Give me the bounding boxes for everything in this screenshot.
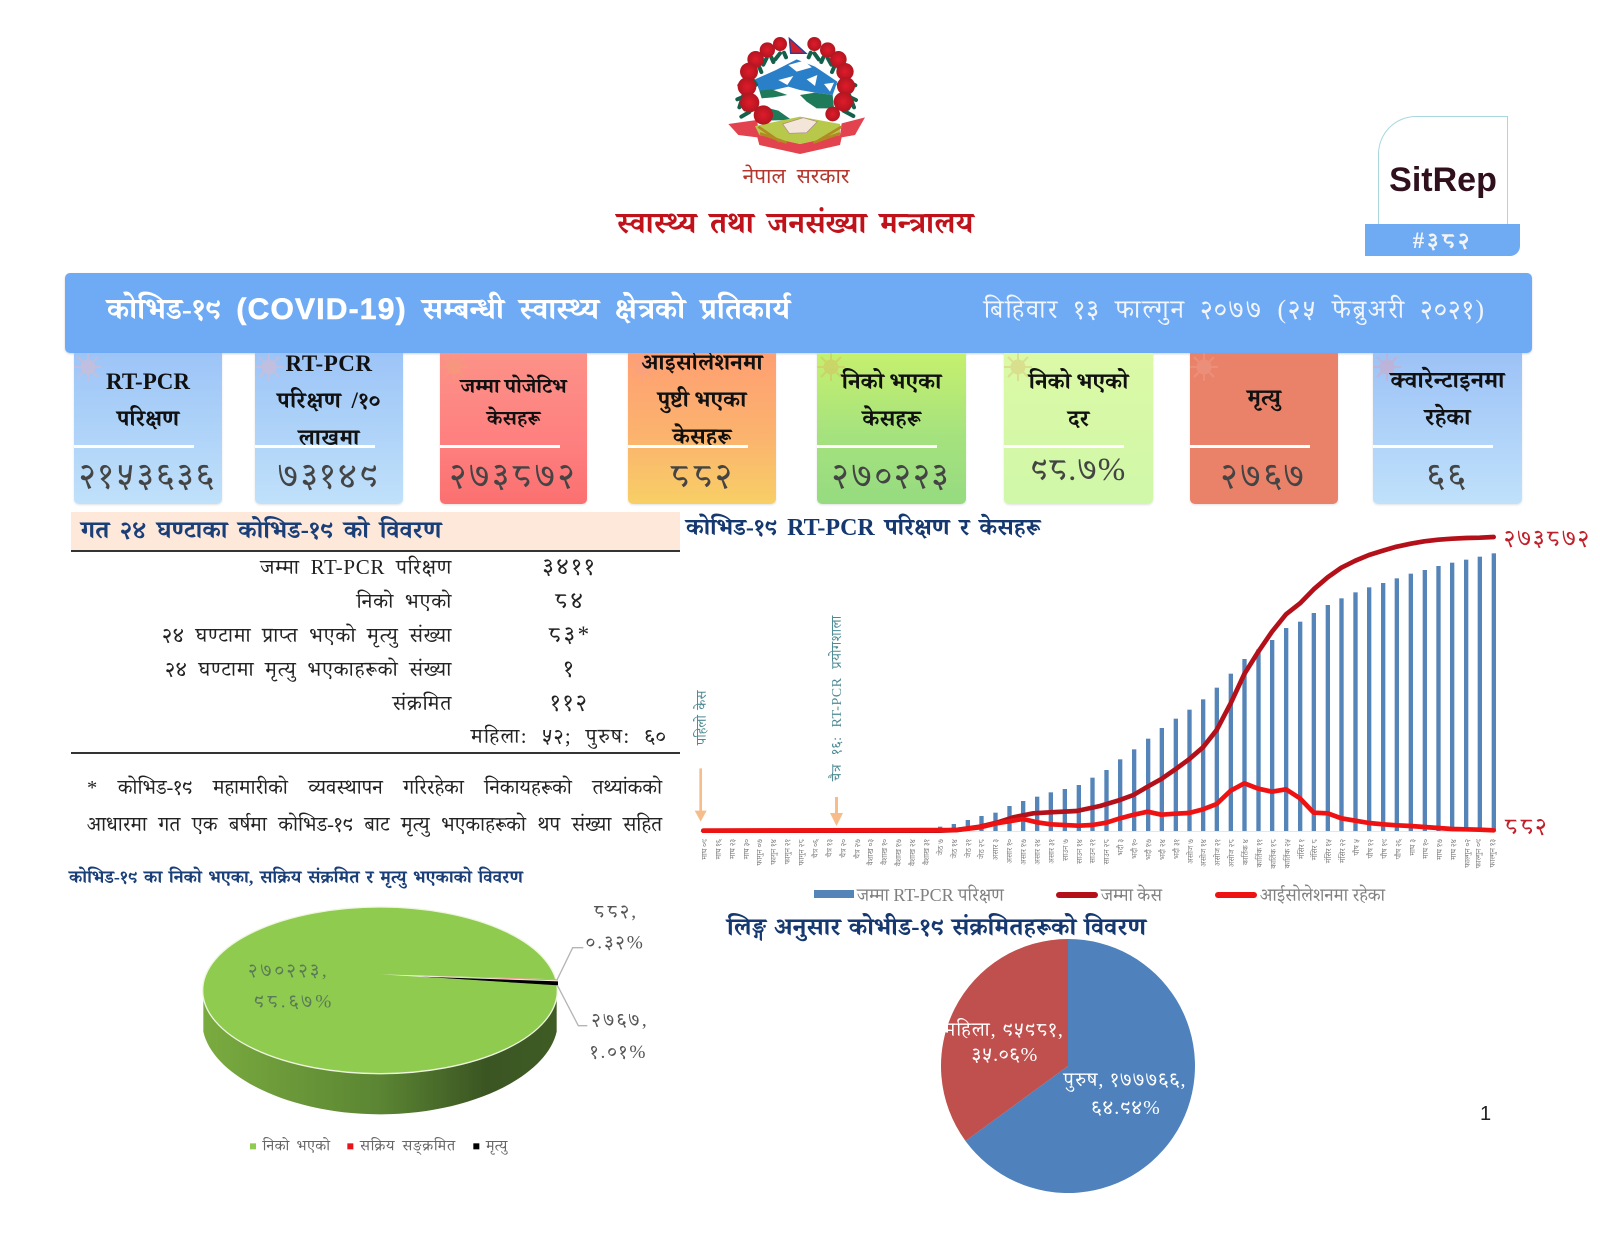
axis labels: मंसिर २२ [1338,839,1347,864]
axis labels: कार्तिक १८ [1268,839,1278,870]
chart: recovered, active and deaths 3D pie: १.०१% [590,1042,648,1063]
axis labels: कार्तिक ११ [1254,839,1264,868]
axis labels: असार ३१ [1047,839,1056,864]
chart: sex-wise pie: पुरुष, १७७७६६, [1063,1069,1186,1093]
axis labels: साउन २१ [1088,839,1097,864]
panel: deaths: २७६७ [1221,456,1307,495]
panel: total positive cases: जम्मा पोजेटिभ [460,374,567,398]
axis labels: असार १० [1005,839,1014,864]
panel: recovered cases: २७०२२३ [832,456,951,495]
slice: female [941,939,1068,1141]
axis labels: फाल्गुन १३ [1488,839,1498,868]
axis labels: फाल्गुन ०२ [1463,839,1473,869]
pie side [203,993,557,1114]
axis labels: पौष १९ [1380,839,1389,860]
axis labels: फागुन २१ [783,839,793,865]
chart: recovered, active and deaths 3D pie: ०.३२% [586,932,645,953]
panel: recovery rate: निको भएको [1029,369,1128,394]
badge: SitRep #382 [1365,116,1520,256]
axis labels: माघ ०९ [700,839,709,861]
end label: total cases: २७३८७२ [1504,526,1591,552]
label: first case: पहिलो केस [692,690,710,746]
page number: 1 [1480,1103,1491,1125]
arrow: first case [695,768,707,822]
axis labels: चैत्र ०६ [811,839,820,859]
chart: sex-wise pie: ३५.०६% [972,1044,1038,1066]
icon: government emblem of Nepal [728,36,865,154]
panel: isolation cases: केसहरू [673,424,731,448]
panel: quarantine: ६६ [1427,456,1468,495]
table: last 24 hours details: ११२ [550,690,590,715]
panel: isolation cases [628,353,776,504]
axis labels: असार २४ [1033,839,1042,865]
banner: COVID-19 health sector response [65,273,1532,353]
legend: जम्मा केस [1100,885,1163,905]
chart: sex-wise pie: महिला, ९५९८१, [943,1017,1064,1041]
axis labels: असार ३ [991,839,1000,860]
panel: recovered cases [817,353,966,504]
axis labels: भदौ ३ [1116,839,1125,856]
axis labels: फाल्गुन ०९ [1474,839,1484,869]
panel: recovery rate: ९८.७% [1031,452,1126,488]
axis labels: जेठ २८ [977,839,986,860]
axis labels: असोज २१ [1213,839,1222,866]
axis labels: माघ २३ [728,839,737,860]
chart: recovered, active and deaths 3D pie: निको भएको [262,1137,331,1155]
badge: SitRep #382: SitRep [1389,161,1497,199]
panel: RT-PCR tests: परिक्षण [117,406,179,431]
table: last 24 hours details: १ [564,656,576,681]
chart: sex-wise pie [941,939,1195,1193]
axis labels: पौष १२ [1366,839,1375,859]
axis labels: मंसिर १ [1297,839,1306,860]
axis labels: चैत्र १३ [825,839,834,858]
badge: SitRep #382: #३८२ [1413,228,1472,253]
heading: last 24 hours: गत २४ घण्टाका कोभिड-१९ को विवरण [81,517,441,544]
axis labels: जेठ २१ [964,839,973,859]
chart: sex-wise pie: ६४.९४% [1091,1097,1161,1119]
axis labels: वैशाख १७ [894,839,903,867]
label: RT-PCR lab date: चैत्र १६: RT-PCR प्रयोगशाला [827,615,845,782]
heading: last 24 hours [71,512,680,552]
panel: RT-PCR tests [74,353,222,504]
axis labels: चैत्र २० [839,839,848,859]
axis labels: पौष ५ [1352,839,1361,856]
axis labels: माघ ३० [742,839,751,860]
axis labels: जेठ ७ [936,839,945,856]
banner date: बिहिवार १३ फाल्गुन २०७७ (२५ फेब्रुअरी २०२१) [984,295,1486,324]
legend: आईसोलेशनमा रहेका [1260,885,1387,905]
note: death count footnote: आधारमा गत एक बर्षमा कोभिड-१९ बाट मृत्यु भएकाहरूको थप संख्या सहित [87,814,662,836]
text: Nepal Government: नेपाल सरकार [742,165,850,188]
chart: recovered, active and deaths 3D pie: मृत्यु [485,1138,509,1155]
panel: recovery rate: दर [1068,406,1089,431]
heading: pie chart of recovered, active and deaths: कोभिड-१९ का निको भएका, सक्रिय संक्रमित र मृत्यु भएकाको विवरण [69,867,523,887]
panel: RT-PCR per million: परिक्षण /१० [277,388,381,412]
axis labels: जेठ १४ [950,839,959,859]
chart: recovered, active and deaths 3D pie: ८८२, [593,901,638,922]
note: death count footnote: * कोभिड-१९ महामारीको व्यवस्थापन गरिरहेका निकायहरूको तथ्यांकको [87,777,662,799]
banner heading: कोभिड-१९ (COVID-19) सम्बन्धी स्वास्थ्य क्षेत्रको प्रतिकार्य [107,293,790,326]
axis labels: माघ १६ [714,839,723,860]
axis labels: वैशाख २४ [908,839,917,867]
axis labels: माघ २४ [1449,839,1458,861]
table: last 24 hours details: निको भएको [356,589,452,613]
slice: active and deaths [380,974,558,985]
panel: deaths: मृत्यु [1247,384,1281,410]
axis labels: असोज २८ [1227,839,1236,867]
axis labels: कार्तिक २५ [1282,839,1292,869]
legend [814,885,1387,905]
axis labels: माघ १७ [1435,839,1444,861]
panel: RT-PCR tests: २१५३६३६ [79,456,217,495]
axis labels: वैशाख १० [880,839,889,866]
panel: recovery rate [1004,353,1153,504]
pie top [203,907,557,1074]
axis labels: भदौ १७ [1144,839,1153,860]
panel: RT-PCR tests: RT-PCR [106,369,190,394]
axis labels: चैत्र २७ [853,839,862,860]
table: last 24 hours details: २४ घण्टामा मृत्यु भएकाहरूको संख्या [165,657,452,681]
axis labels: फागुन १४ [769,839,779,866]
heading: chart of tests and cases: कोभिड-१९ RT-PCR परिक्षण र केसहरू [686,515,1040,541]
axis labels: साउन ७ [1061,839,1070,862]
panel: RT-PCR per million [255,353,403,504]
axis labels: भदौ ३१ [1172,839,1181,859]
axis labels: मंसिर ८ [1310,839,1319,861]
heading: sex-wise breakdown: लिङ्ग अनुसार कोभीड-१९ संक्रमितहरूको विवरण [727,914,1146,941]
panel: quarantine: रहेका [1425,405,1470,431]
axis labels: माघ १० [1421,839,1430,860]
panel: isolation cases: ८८२ [669,456,735,495]
panel: RT-PCR per million: लाखमा [298,424,360,450]
chart: recovered, active and deaths 3D pie: ९८.६७% [254,991,334,1012]
panel: recovered cases: केसहरू [862,406,921,431]
axis labels: वैशाख ३१ [922,839,931,866]
chart: recovered, active and deaths 3D pie: २७६७, [592,1010,649,1031]
panel: quarantine: क्वारेन्टाइनमा [1391,368,1504,394]
table: last 24 hours details: ८४ [554,588,586,613]
axis labels: मंसिर १५ [1324,839,1333,864]
axis labels: फागुन २८ [797,839,807,866]
table: last 24 hours details: ८३* [548,622,592,647]
panel: quarantine [1373,353,1522,504]
panel: recovered cases: निको भएका [842,369,941,394]
bars: total RT-PCR tests [938,553,1496,831]
panel: total positive cases: केसहरू [487,406,540,430]
legend: जम्मा RT-PCR परिक्षण [856,885,1005,905]
panel: isolation cases: पुष्टी भएका [658,386,746,412]
axis labels [700,839,1498,870]
axis labels: कार्तिक ४ [1240,839,1250,866]
line: total cases [703,537,1494,831]
axis labels: फागुन ०७ [755,839,765,866]
chart: recovered, active and deaths 3D pie: सक्रिय सङ्क्रमित [359,1137,456,1156]
axis labels: भदौ २४ [1158,839,1167,860]
table: last 24 hours details: महिला: ५२; पुरुष: ६० [471,724,667,748]
title: ministry of health and population: स्वास्थ्य तथा जनसंख्या मन्त्रालय [617,207,973,240]
panel: total positive cases: २७३८७२ [450,456,577,495]
end label: isolation: ८८२ [1504,814,1548,840]
arrow: RT-PCR lab [830,797,843,826]
chart: recovered, active and deaths 3D pie: २७०२२३, [248,961,330,982]
axis labels: माघ ३ [1408,839,1417,856]
note: death count footnote [87,775,663,837]
table: last 24 hours details: संक्रमित [393,691,452,715]
axis labels: असोज ७ [1186,839,1195,864]
axis labels: असोज १४ [1199,839,1208,867]
panel: total positive cases [440,353,587,504]
table: last 24 hours details: ३४११ [543,554,597,579]
axis labels: भदौ १० [1130,839,1139,859]
axis labels: वैशाख ०३ [866,839,875,866]
panel: deaths [1190,353,1338,504]
slice: male [966,939,1195,1193]
line: in isolation [703,783,1494,831]
axis labels: साउन १४ [1075,839,1084,865]
axis labels: साउन २८ [1102,839,1111,865]
axis labels: पौष २६ [1394,839,1403,860]
table: last 24 hours details [71,554,680,754]
panel: RT-PCR per million: ७३१४९ [278,456,380,495]
table: last 24 hours details: २४ घण्टामा प्राप्त भएको मृत्यु संख्या [162,623,452,647]
chart: cumulative tests and cases [692,526,1591,905]
axis labels: असार १७ [1019,839,1028,865]
table: last 24 hours details: जम्मा RT-PCR परिक्षण [260,555,452,579]
chart: recovered, active and deaths 3D pie [202,901,649,1156]
